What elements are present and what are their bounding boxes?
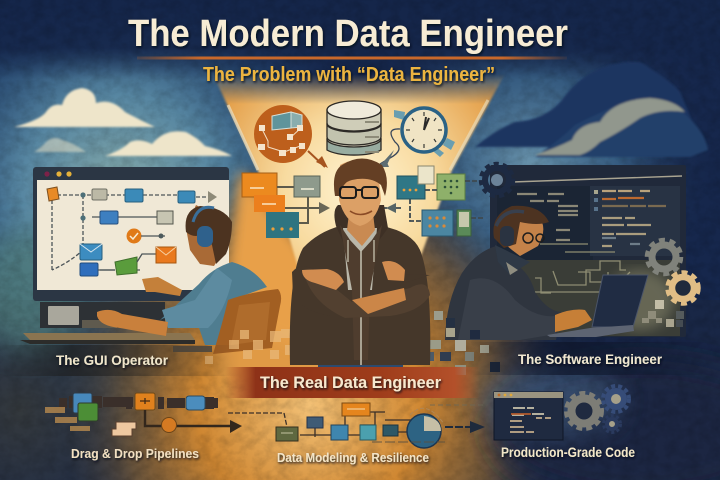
banner: real data engineer: The Real Data Engineer <box>260 373 441 392</box>
diagram: right of real engineer <box>382 166 485 236</box>
clouds: left sky <box>14 88 232 156</box>
panel: GUI operator monitor <box>33 167 229 301</box>
label: software engineer: The Software Engineer <box>518 351 663 367</box>
icon: drag and drop pipeline <box>45 393 242 436</box>
icon: orange workflow circle <box>254 105 328 168</box>
mosaic: centre-right pixels <box>416 310 500 375</box>
banner: real data engineer <box>225 367 480 398</box>
diagram: left of real engineer <box>242 173 330 238</box>
chair: GUI operator <box>173 289 281 354</box>
subtitle: The Problem with “Data Engineer” <box>203 64 495 86</box>
label: GUI operator: The GUI Operator <box>56 353 169 368</box>
icon: laptop <box>547 275 648 337</box>
label: drag and drop: Drag & Drop Pipelines <box>71 446 199 461</box>
code lines <box>516 191 666 246</box>
mosaic: right pixels <box>642 300 684 327</box>
label: production code: Production-Grade Code <box>501 445 635 460</box>
icon: tan gear <box>668 272 698 304</box>
clouds: right sky <box>475 62 708 157</box>
person: real data engineer <box>290 158 430 372</box>
label: data modeling: Data Modeling & Resilience <box>277 450 429 465</box>
icon: data modeling and resilience <box>228 403 486 448</box>
mosaic: left pixels <box>205 329 295 364</box>
icon: grey gear <box>647 240 681 274</box>
icon: production gears <box>566 386 629 432</box>
person: software engineer <box>445 206 592 340</box>
icon: stopwatch <box>376 108 455 167</box>
title rule <box>137 56 567 60</box>
icon: small code window <box>494 392 563 440</box>
icon: database <box>327 101 381 155</box>
panel: software engineer monitor <box>490 165 686 337</box>
desk: GUI operator <box>20 302 195 344</box>
icon: gear top of monitor <box>481 164 513 196</box>
dark strip: right label <box>470 342 720 375</box>
dark strip: left label <box>0 345 240 376</box>
title: The Modern Data Engineer <box>128 13 568 55</box>
workflow diagram <box>47 187 217 276</box>
person: GUI operator <box>97 205 267 345</box>
spotlight cone <box>205 72 506 378</box>
